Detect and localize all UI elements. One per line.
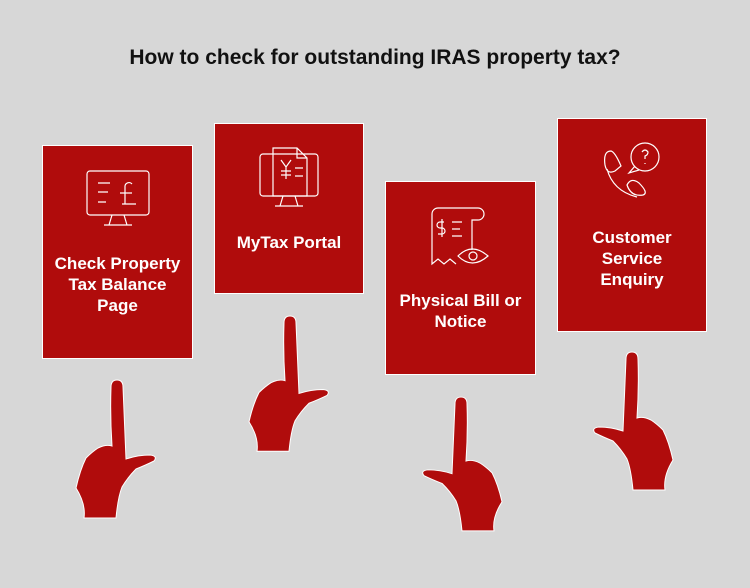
label: Page (97, 296, 138, 315)
card: mytax portal (214, 123, 364, 294)
card: physical bill (385, 181, 536, 375)
card: customer service (557, 118, 707, 332)
label: MyTax Portal (237, 233, 341, 252)
label: Customer (592, 228, 672, 247)
icon: monitor pound (86, 170, 150, 226)
icon: document yen (259, 147, 319, 207)
icon: phone question (604, 142, 660, 198)
label (400, 291, 522, 331)
hand 2 (249, 316, 328, 451)
label: Tax Balance (69, 275, 166, 294)
hand 3 (423, 397, 502, 531)
label: Enquiry (600, 270, 664, 289)
label: Check Property (55, 254, 180, 273)
label: Notice (435, 312, 486, 331)
label: Physical Bill or (400, 291, 521, 310)
icon: bill eye (431, 207, 489, 266)
label (592, 228, 672, 289)
hand 4 (594, 352, 673, 490)
title: How to check for outstanding IRAS property tax? (129, 46, 621, 69)
card: check balance page (42, 145, 193, 359)
label (55, 254, 180, 315)
label: Service (602, 249, 662, 268)
hand 1 (76, 380, 155, 518)
